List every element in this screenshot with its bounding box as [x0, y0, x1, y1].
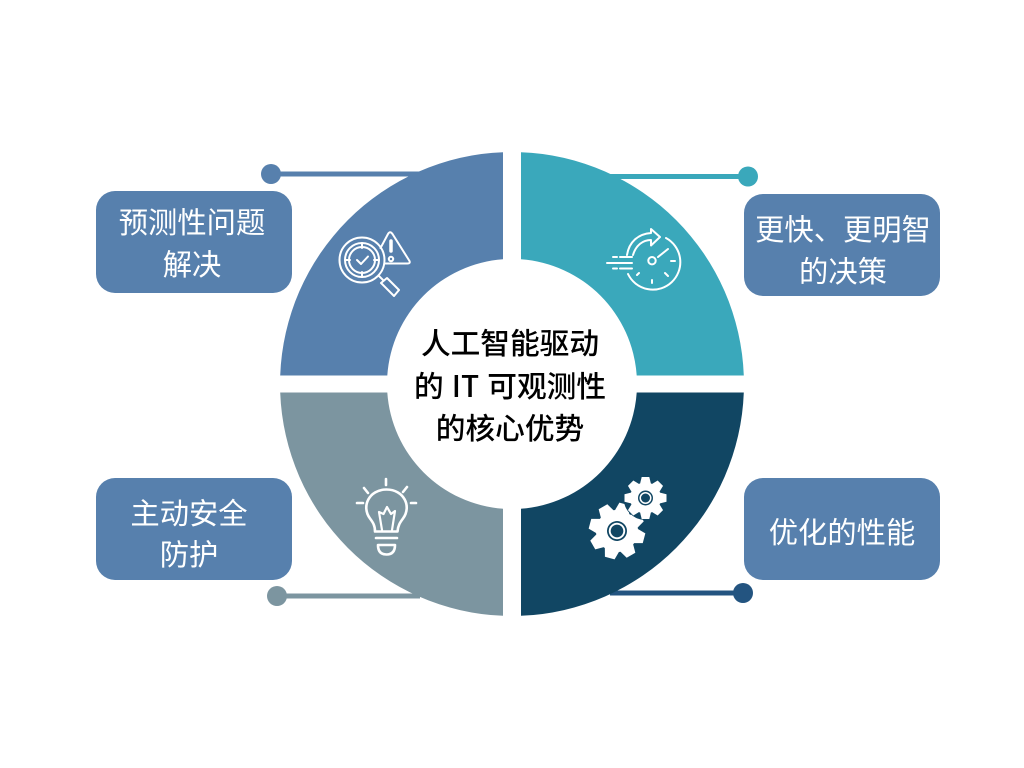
center title: 的核心优势	[436, 405, 584, 448]
label: faster smarter decisions: 的决策	[799, 256, 887, 288]
segment: top left	[280, 152, 503, 376]
connector: top right	[610, 166, 758, 186]
label: predictive problem solving: 解决	[163, 248, 221, 282]
segment: top right	[521, 152, 744, 376]
icon: light bulb	[357, 479, 416, 554]
large gear	[583, 497, 651, 565]
connector: bottom left	[267, 586, 420, 606]
small gear	[624, 476, 668, 520]
label: predictive problem solving: 预测性问题	[119, 207, 265, 240]
connector: bottom right	[610, 583, 753, 603]
label: proactive security	[96, 478, 292, 580]
connector: top left	[261, 164, 420, 184]
label: optimized performance: 优化的性能	[769, 517, 915, 550]
label: proactive security: 防护	[160, 539, 218, 572]
icon: speedometer with arrow	[607, 229, 680, 290]
label: proactive security: 主动安全	[130, 498, 248, 530]
label: predictive problem solving	[96, 191, 292, 293]
center title	[414, 320, 606, 448]
segment: bottom left	[280, 392, 503, 616]
segment: bottom right	[521, 392, 744, 616]
icon: gears	[583, 476, 668, 565]
center title: 人工智能驱动	[421, 320, 599, 363]
icon: magnifier with warning triangle	[340, 232, 410, 296]
label: faster smarter decisions	[744, 194, 940, 296]
label: faster smarter decisions: 更快、更明智	[755, 214, 931, 247]
center title: 的 IT 可观测性	[414, 362, 606, 406]
label: optimized performance	[744, 478, 940, 580]
